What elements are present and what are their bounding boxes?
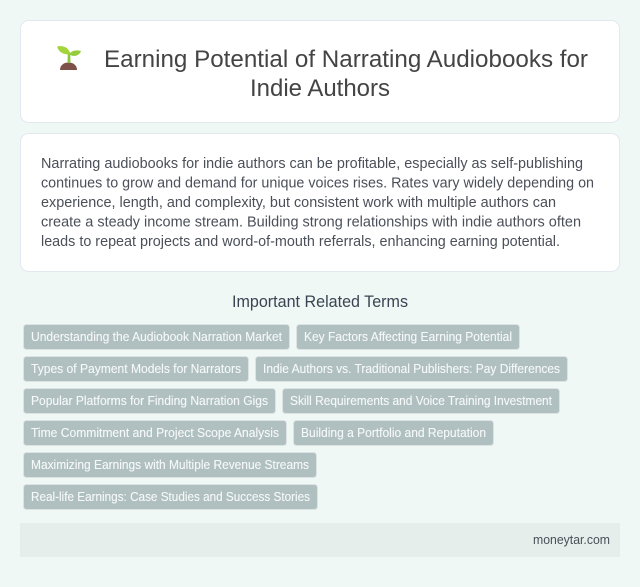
chip: key factors (296, 324, 520, 350)
title: Indie Authors (250, 75, 390, 102)
chip: payment models: Types of Payment Models for Narrators (31, 362, 241, 376)
text block: description: continues to grow and demand for unique voices rises. Rates vary widely depending on (41, 174, 594, 192)
text block: description: experience, length, and complexity, but consistent work with multiple authors can (41, 194, 556, 211)
footer (20, 523, 620, 557)
chip: time commitment (24, 420, 286, 446)
panel: introduction (20, 134, 620, 272)
title (104, 46, 588, 102)
chip: multiple revenue streams: Maximizing Earnings with Multiple Revenue Streams (31, 458, 309, 472)
chip: audiobook narration market: Understanding the Audiobook Narration Market (31, 330, 282, 344)
panel: title card (20, 20, 620, 122)
chip: multiple revenue streams (24, 452, 316, 478)
chip: indie vs traditional (256, 356, 568, 382)
chip: case studies (24, 484, 318, 510)
chip: audiobook narration market (24, 324, 290, 350)
chip: time commitment: Time Commitment and Project Scope Analysis (31, 426, 279, 440)
chip: skill requirements (282, 388, 560, 414)
text block: description (41, 155, 594, 250)
title: Earning Potential of Narrating Audiobooks for (104, 46, 588, 73)
text block: description: leads to repeat projects and word-of-mouth referrals, enhancing earning potential. (41, 233, 560, 250)
icon: seedling (57, 46, 81, 70)
chip: popular platforms (24, 388, 276, 414)
chip: indie vs traditional: Indie Authors vs. Traditional Publishers: Pay Differences (263, 362, 560, 376)
heading: related terms: Important Related Terms (232, 293, 408, 311)
chip: payment models (24, 356, 248, 382)
chip: popular platforms: Popular Platforms for Finding Narration Gigs (31, 394, 268, 408)
text block: description: create a steady income stream. Building strong relationships with indie authors often (41, 214, 581, 230)
chip: portfolio (294, 420, 494, 446)
chip: skill requirements: Skill Requirements and Voice Training Investment (290, 394, 552, 408)
chip: portfolio: Building a Portfolio and Reputation (301, 426, 486, 440)
chip: case studies: Real-life Earnings: Case Studies and Success Stories (31, 490, 310, 504)
panel: related terms chips (24, 324, 568, 510)
footer: moneytar.com (533, 532, 610, 547)
chip: key factors: Key Factors Affecting Earning Potential (304, 330, 512, 344)
text block: description: Narrating audiobooks for indie authors can be profitable, especially as self-publishing (41, 155, 583, 172)
